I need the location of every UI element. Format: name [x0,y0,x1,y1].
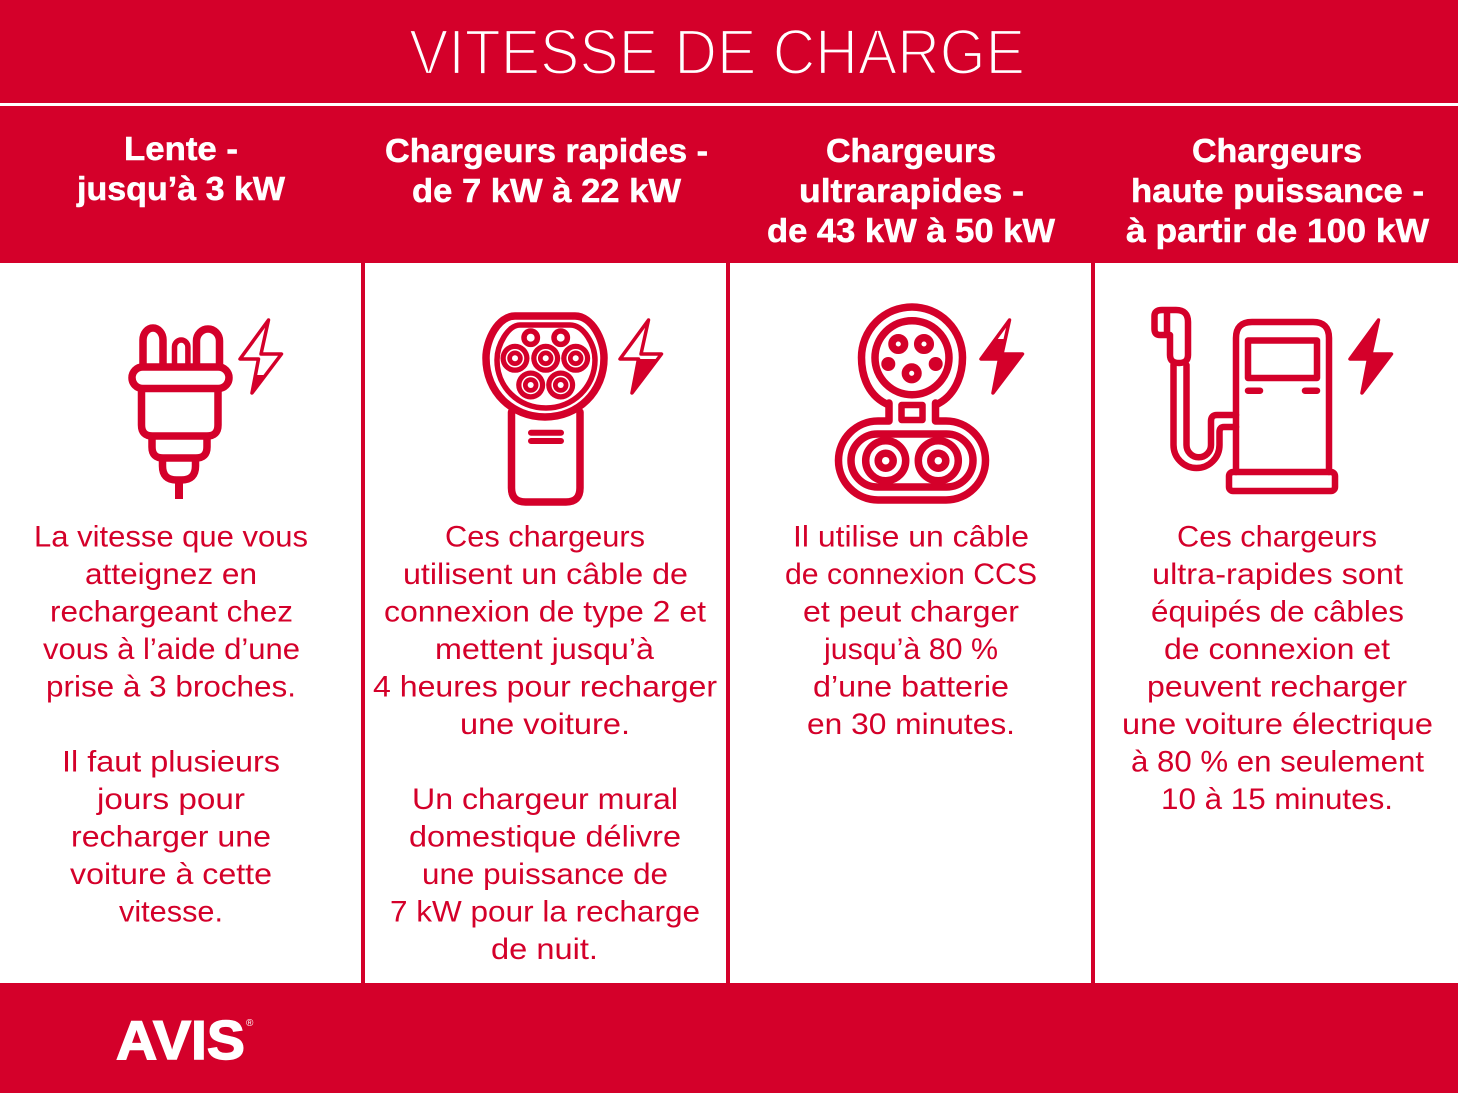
panel: chargeurs haute puissance [1122,132,1433,816]
text: chargeurs haute puissance description: une voiture électrique [1122,708,1433,741]
text: lente description: jours pour [96,783,245,816]
text: lente description: vous à l’aide d’une [43,633,300,666]
heading: chargeurs rapides: de 7 kW à 22 kW [412,172,682,209]
panel: lente [34,130,308,928]
text: chargeurs ultrarapides description: de connexion CCS [785,558,1037,591]
title: VITESSE DE CHARGE [409,16,1025,88]
heading: chargeurs ultrarapides: Chargeurs [826,132,996,169]
heading: chargeurs haute puissance [1126,132,1430,249]
text: chargeurs haute puissance description: peuvent recharger [1147,670,1407,704]
text: chargeurs haute puissance description [1122,520,1433,816]
text: chargeurs rapides description: connexion de type 2 et [384,596,707,628]
text: chargeurs ultrarapides description: en 30 minutes. [807,708,1015,741]
panel: chargeurs rapides [373,132,717,966]
heading: chargeurs rapides [385,132,708,209]
text: chargeurs rapides description: 7 kW pour la recharge [390,896,700,928]
text: chargeurs ultrarapides description: et peut charger [803,596,1019,628]
text: chargeurs haute puissance description: Ces chargeurs [1177,520,1377,554]
heading: chargeurs rapides: Chargeurs rapides - [385,132,708,169]
text: lente description: La vitesse que vous [34,520,308,554]
text: chargeurs haute puissance description: de connexion et [1164,633,1391,666]
footer band [0,983,1458,1093]
header band [0,0,1458,263]
text: lente description: rechargeant chez [50,596,293,628]
text: chargeurs haute puissance description: équipés de câbles [1151,596,1404,628]
panel: chargeurs ultrarapides [767,132,1056,741]
text: chargeurs rapides description: Un chargeur mural [412,783,678,816]
text: chargeurs rapides description: une voiture. [460,708,630,741]
text: chargeurs rapides description [373,520,717,966]
text: lente description: vitesse. [119,896,223,928]
header divider [0,103,1458,106]
icon: charging station [1154,310,1335,491]
icon: plug [132,328,229,499]
icon: lightning bolt full [1350,320,1392,393]
heading: lente [76,130,286,207]
text: chargeurs haute puissance description: à 80 % en seulement [1131,746,1425,778]
heading: chargeurs ultrarapides: de 43 kW à 50 kW [767,212,1056,249]
heading: lente: jusqu’à 3 kW [76,170,286,207]
text: chargeurs rapides description: mettent jusqu’à [435,633,654,666]
icon: type 2 connector [486,316,604,502]
text: chargeurs rapides description: Ces chargeurs [445,520,645,554]
text: chargeurs haute puissance description: 10 à 15 minutes. [1161,783,1393,816]
text: chargeurs haute puissance description: ultra-rapides sont [1152,558,1404,591]
text: chargeurs rapides description: une puissance de [422,858,668,891]
text: chargeurs ultrarapides description [785,520,1037,741]
icon: lightning bolt almost full [981,320,1022,393]
column dividers [361,263,1095,983]
text: lente description: Il faut plusieurs [62,746,280,778]
text: chargeurs ultrarapides description: d’une batterie [813,670,1009,704]
text: chargeurs rapides description: de nuit. [491,933,598,966]
heading: chargeurs haute puissance: à partir de 100 kW [1126,212,1430,249]
text: chargeurs rapides description: domestique délivre [409,820,681,854]
heading: chargeurs ultrarapides [767,132,1056,249]
text: lente description: recharger une [71,820,271,854]
text: chargeurs ultrarapides description: Il utilise un câble [793,520,1029,554]
text: lente description: prise à 3 broches. [46,670,296,704]
logo: AVIS: AVIS [116,1009,245,1071]
icon: lightning bolt mostly empty [240,320,282,393]
icon: CCS connector [838,307,986,500]
heading: chargeurs haute puissance: haute puissance - [1131,172,1424,209]
heading: chargeurs ultrarapides: ultrarapides - [799,172,1024,209]
text: lente description: voiture à cette [70,858,272,891]
text: chargeurs ultrarapides description: jusqu’à 80 % [823,633,998,666]
text: lente description: atteignez en [85,558,257,591]
text: chargeurs rapides description: 4 heures pour recharger [373,670,717,704]
logo: AVIS: ® [246,1018,254,1029]
icon: lightning bolt half full [620,320,662,393]
heading: chargeurs haute puissance: Chargeurs [1192,132,1362,169]
heading: lente: Lente - [124,130,238,167]
text: chargeurs rapides description: utilisent un câble de [403,558,688,591]
text: lente description [34,520,308,928]
